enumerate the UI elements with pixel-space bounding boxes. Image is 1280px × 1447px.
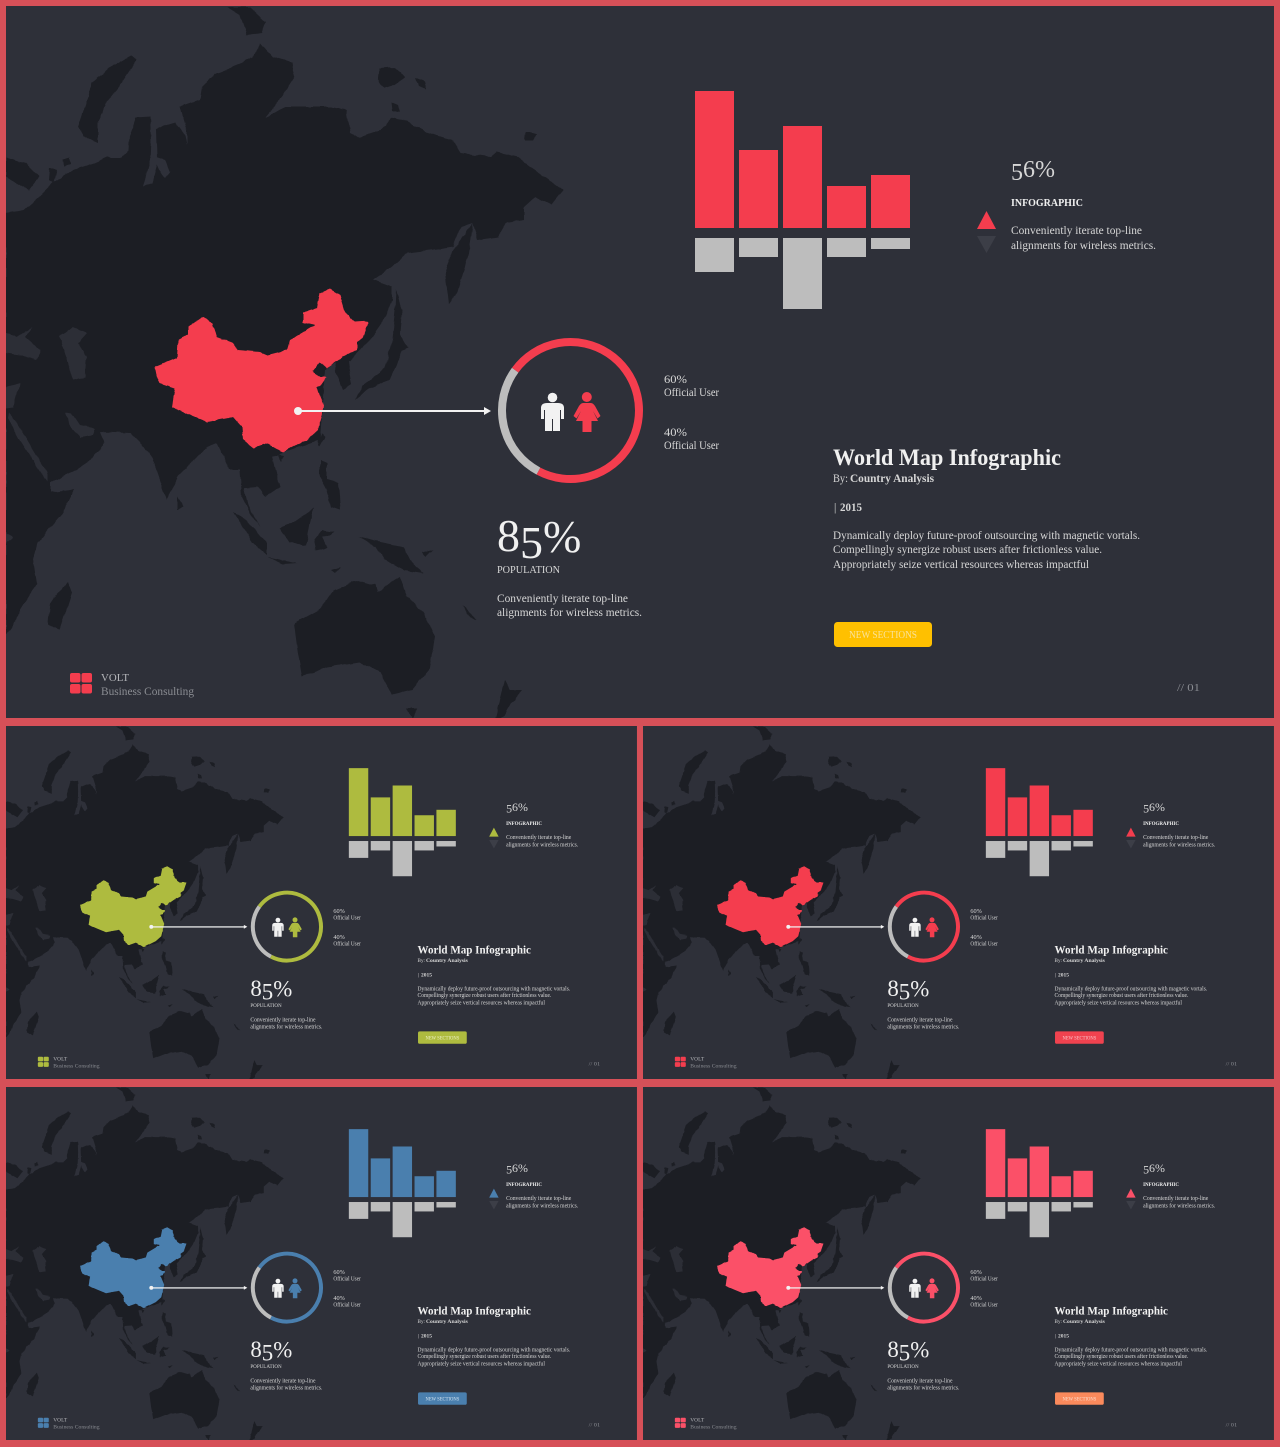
icon: up and down triangles [1126,1189,1136,1209]
icon: up and down triangles [489,828,499,848]
legend: official users: 60% [333,1270,345,1276]
legend: official users: Official User [333,1275,361,1282]
icon: up and down triangles [977,211,996,253]
legend: official users [333,1270,361,1309]
logo: volt: VOLT [101,672,129,684]
title block: Country Analysis [850,473,935,485]
stat: 85% population: alignments for wireless metrics. [250,1384,323,1391]
stat: 56% infographic: Conveniently iterate top-line [1143,1196,1209,1202]
title block: Country Analysis [1063,1319,1106,1325]
title block: 2015 [421,972,432,978]
stat: 85% population [497,520,642,618]
title block: World Map Infographic [418,945,531,957]
logo: volt: VOLT [53,1057,68,1063]
panel: pink slide [643,1087,1274,1441]
bar chart [986,1129,1093,1237]
title block: World Map Infographic [1055,1306,1168,1318]
legend: official users: Official User [970,1275,998,1282]
legend: official users: Official User [970,914,998,921]
stat: 85% population [250,1337,323,1391]
donut ring with people icons [890,893,958,961]
legend: official users: Official User [333,1302,361,1309]
body text [418,985,571,1007]
icon: up and down triangles [1126,828,1136,848]
title block: | [834,502,836,514]
world map background [643,726,920,1080]
body text: Dynamically deploy future-proof outsourcing with magnetic vortals. [418,1346,571,1353]
stat: 56% infographic [506,800,579,848]
body text: Compellingly synergize robust users after frictionless value. [1055,992,1189,999]
stat: 56% infographic: Conveniently iterate top-line [506,835,572,841]
title block: 2015 [840,502,862,514]
title block [418,945,531,978]
body text: Appropriately seize vertical resources whereas impactful [1055,1000,1182,1007]
stat: 85% population: alignments for wireless metrics. [887,1384,960,1391]
title block [1055,1306,1168,1339]
world map background [6,1087,283,1441]
bar chart [695,91,910,309]
body text: Dynamically deploy future-proof outsourcing with magnetic vortals. [1055,985,1208,992]
stat: 85% population: POPULATION [497,564,560,576]
stat: 85% population [250,980,322,1030]
body text: Dynamically deploy future-proof outsourcing with magnetic vortals. [833,528,1140,542]
legend: official users: Official User [970,1302,998,1309]
title block: By: [1055,958,1062,964]
legend: official users: 40% [333,1296,345,1302]
donut ring with people icons [253,1254,321,1322]
stat: 85% population: Conveniently iterate top-line [497,591,628,605]
button: new sections: NEW SECTIONS [425,1397,460,1402]
legend: official users [664,372,719,452]
logo: volt [675,1418,737,1431]
stat: 85% population: POPULATION [250,1364,282,1370]
legend: official users: Official User [664,438,719,452]
legend: official users: Official User [333,914,361,921]
stat: 56% infographic [1011,157,1156,252]
map highlight: China [717,866,824,947]
stat: 56% infographic: 56% [1143,800,1165,815]
world map background [6,7,563,720]
map highlight: China [155,289,369,452]
stat: 56% infographic: INFOGRAPHIC [506,1182,542,1188]
title block: 2015 [1058,972,1069,978]
stat: 56% infographic [506,1161,579,1209]
stat: 56% infographic: alignments for wireless metrics. [1143,1202,1216,1209]
body text [1055,1346,1208,1368]
body text [418,1346,571,1368]
logo: volt: Business Consulting [690,1425,737,1431]
donut ring with people icons [253,893,321,961]
legend: official users: 60% [664,372,687,386]
logo: volt [675,1057,737,1070]
icon: up and down triangles [489,1189,499,1209]
title block: World Map Infographic [1055,945,1168,957]
legend: official users: 40% [970,1296,982,1302]
legend: official users: 40% [970,935,982,941]
stat: 56% infographic: INFOGRAPHIC [1143,821,1179,827]
bar chart [349,1129,456,1237]
title block: Country Analysis [1063,958,1106,964]
button: new sections: NEW SECTIONS [849,630,917,641]
logo: volt [70,672,194,698]
logo: volt: VOLT [690,1057,705,1063]
logo: volt [38,1057,100,1070]
bar chart [349,768,456,876]
arrow from China to ring [786,1286,884,1290]
title block [418,1306,531,1339]
title block: World Map Infographic [833,445,1061,470]
stat: 85% population: alignments for wireless metrics. [887,1023,960,1030]
panel: blue slide [6,1087,637,1441]
stat: 85% population: Conveniently iterate top-line [887,1018,953,1023]
stat: 56% infographic [1143,1161,1216,1209]
title block [1055,945,1168,978]
body text: Appropriately seize vertical resources whereas impactful [418,1000,545,1007]
stat: 85% population: POPULATION [250,1003,282,1009]
arrow from China to ring [149,1286,247,1290]
button: new sections [834,622,932,647]
stat: 56% infographic: 56% [1143,1161,1165,1176]
legend: official users: 60% [970,1270,982,1276]
title block: | [1055,1333,1056,1339]
stat: 85% population: 85% [250,976,292,1005]
map highlight: China [80,1227,187,1308]
stat: 56% infographic: INFOGRAPHIC [1011,197,1083,209]
title block: | [1055,972,1056,978]
legend: official users [970,1270,998,1309]
legend: official users: Official User [664,385,719,399]
stat: 85% population: 85% [887,976,929,1005]
logo: volt: VOLT [53,1418,68,1424]
legend: official users: Official User [333,941,361,948]
legend: official users: Official User [970,941,998,948]
legend: official users [333,909,361,948]
body text: Compellingly synergize robust users after frictionless value. [833,542,1102,556]
page number: // 01 [1226,1062,1238,1068]
body text: Dynamically deploy future-proof outsourcing with magnetic vortals. [1055,1346,1208,1353]
map highlight: China [80,866,187,947]
stat: 85% population: Conveniently iterate top-line [887,1379,953,1384]
body text: Appropriately seize vertical resources whereas impactful [833,557,1090,571]
title block: | [418,972,419,978]
world map background [643,1087,920,1441]
page number: // 01 [589,1423,601,1429]
stat: 85% population [887,1337,960,1391]
panel: main slide (red) [6,6,1274,720]
stat: 56% infographic: Conveniently iterate top-line [1011,223,1142,237]
stat: 56% infographic: 56% [1011,157,1055,186]
donut ring with people icons [502,342,639,479]
stat: 85% population: 85% [887,1337,929,1366]
stat: 85% population: 85% [497,510,581,568]
title block: By: [1055,1319,1062,1325]
body text [833,528,1140,571]
arrow from China to ring [149,925,247,929]
stat: 56% infographic: INFOGRAPHIC [1143,1182,1179,1188]
button: new sections [418,1031,467,1044]
title block: Country Analysis [426,958,469,964]
button: new sections: NEW SECTIONS [425,1036,460,1041]
stat: 56% infographic [1143,800,1216,848]
logo: volt: Business Consulting [53,1425,100,1431]
legend: official users: 40% [664,425,687,439]
body text: Appropriately seize vertical resources whereas impactful [1055,1361,1182,1368]
stat: 85% population: POPULATION [887,1364,919,1370]
button: new sections [418,1392,467,1405]
stat: 56% infographic: 56% [506,1161,528,1176]
title block: 2015 [1058,1333,1069,1339]
title block [833,445,1061,514]
stat: 56% infographic: alignments for wireless metrics. [1011,238,1156,252]
map highlight: China [717,1227,824,1308]
body text: Compellingly synergize robust users after frictionless value. [418,1353,552,1360]
title block: World Map Infographic [418,1306,531,1318]
panel: olive slide [6,726,637,1080]
stat: 56% infographic: 56% [506,800,528,815]
body text [1055,985,1208,1007]
legend: official users: 60% [970,909,982,915]
title block: 2015 [421,1333,432,1339]
page number: // 01 [1226,1423,1238,1429]
arrow from China to ring [294,407,491,415]
page number: // 01 [589,1062,601,1068]
button: new sections [1055,1031,1104,1044]
legend: official users: 40% [333,935,345,941]
stat: 85% population: Conveniently iterate top-line [250,1379,316,1384]
world map background [6,726,283,1080]
body text: Compellingly synergize robust users after frictionless value. [418,992,552,999]
title block: By: [833,473,848,485]
body text: Dynamically deploy future-proof outsourcing with magnetic vortals. [418,985,571,992]
logo: volt: VOLT [690,1418,705,1424]
stat: 85% population: alignments for wireless metrics. [497,605,642,619]
legend: official users [970,909,998,948]
stat: 85% population: POPULATION [887,1003,919,1009]
stat: 56% infographic: alignments for wireless metrics. [506,1202,579,1209]
body text: Compellingly synergize robust users after frictionless value. [1055,1353,1189,1360]
button: new sections: NEW SECTIONS [1062,1036,1097,1041]
logo: volt: Business Consulting [690,1064,737,1070]
title block: | [418,1333,419,1339]
logo: volt: Business Consulting [53,1064,100,1070]
stat: 56% infographic: Conveniently iterate top-line [1143,835,1209,841]
legend: official users: 60% [333,909,345,915]
logo: volt [38,1418,100,1431]
title block: By: [418,1319,425,1325]
stat: 56% infographic: INFOGRAPHIC [506,821,542,827]
stat: 85% population: Conveniently iterate top-line [250,1018,316,1023]
stat: 85% population: 85% [250,1337,292,1366]
button: new sections [1055,1392,1104,1405]
stat: 56% infographic: alignments for wireless metrics. [506,841,579,848]
title block: By: [418,958,425,964]
panel: red slide [643,726,1274,1080]
title block: Country Analysis [426,1319,469,1325]
body text: Appropriately seize vertical resources whereas impactful [418,1361,545,1368]
page number: // 01 [1177,683,1200,694]
button: new sections: NEW SECTIONS [1062,1397,1097,1402]
bar chart [986,768,1093,876]
donut ring with people icons [890,1254,958,1322]
stat: 56% infographic: Conveniently iterate top-line [506,1196,572,1202]
stat: 56% infographic: alignments for wireless metrics. [1143,841,1216,848]
arrow from China to ring [786,925,884,929]
stat: 85% population [888,980,959,1030]
logo: volt: Business Consulting [101,686,194,698]
stat: 85% population: alignments for wireless metrics. [250,1023,323,1030]
